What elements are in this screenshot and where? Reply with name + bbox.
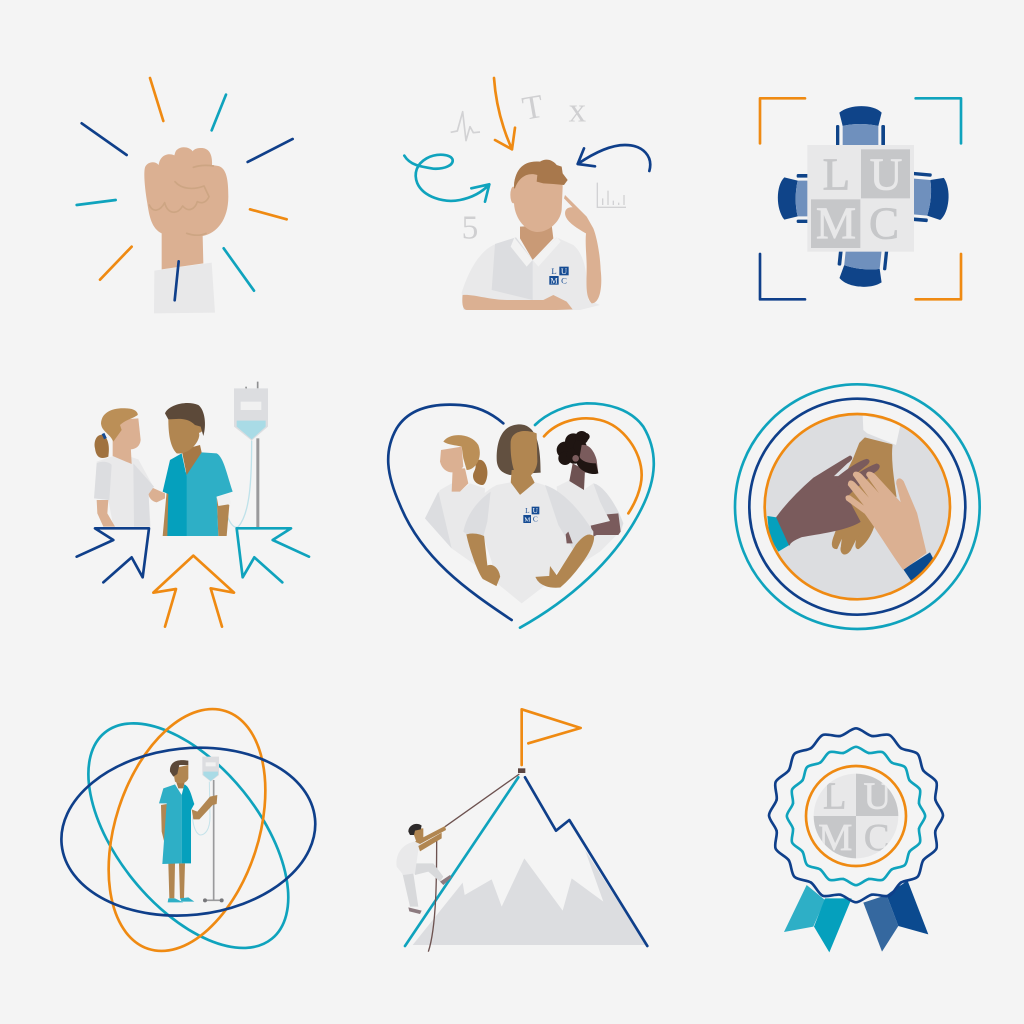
flag <box>522 709 581 765</box>
LUMC seal <box>813 773 899 859</box>
chairs <box>778 106 951 289</box>
medium-tone hand <box>833 438 896 554</box>
table with LUMC logo <box>807 145 914 252</box>
person left <box>425 435 487 568</box>
IV bag <box>234 382 268 441</box>
shirt <box>462 237 600 310</box>
nurse <box>94 408 165 527</box>
orbit rings <box>50 688 327 983</box>
heart orange stroke <box>544 418 642 513</box>
logo on shirt: M <box>550 276 558 285</box>
teal cuff <box>767 516 789 552</box>
table with LUMC logo: C <box>869 198 899 248</box>
ribbon right <box>863 880 928 952</box>
heart teal stroke <box>520 403 654 628</box>
LUMC seal: U <box>863 775 891 817</box>
teal looping arrow <box>404 155 489 202</box>
neck <box>520 225 553 260</box>
illustration grid <box>60 76 981 952</box>
logo on shirt: M <box>524 517 530 524</box>
rope <box>428 774 519 952</box>
logo on shirt <box>549 266 569 285</box>
hair <box>514 160 568 188</box>
IV pole <box>256 438 259 528</box>
raised arm <box>564 195 601 303</box>
orange arrow <box>153 556 234 627</box>
LUMC seal: L <box>823 775 846 817</box>
person centre <box>463 424 593 603</box>
head <box>514 167 563 232</box>
navy ring <box>749 399 965 615</box>
panel: meeting table <box>760 98 961 299</box>
mountain teal slope <box>405 777 518 946</box>
IV pole and bag <box>193 757 224 902</box>
panel: climber and mountain <box>396 709 647 952</box>
collar <box>511 237 561 267</box>
logo on shirt: C <box>533 515 538 524</box>
mountain <box>413 850 646 945</box>
orange ring <box>806 766 906 866</box>
panel: joined hands in circles <box>735 384 980 629</box>
corner brackets <box>760 98 961 299</box>
rosette navy scalloped edge <box>769 728 943 902</box>
radiating lines <box>77 78 293 300</box>
climber <box>396 824 452 914</box>
panel: nurse and patient with arrows <box>77 382 309 627</box>
logo on shirt: U <box>533 506 539 515</box>
logo on shirt <box>523 506 539 524</box>
navy cuff <box>903 552 934 582</box>
logo on shirt: U <box>561 266 568 276</box>
navy arrow <box>77 528 149 582</box>
logo on shirt: L <box>525 506 530 515</box>
upper sleeve <box>863 415 901 445</box>
panel: thinking nurse <box>404 78 650 310</box>
gray disc <box>765 414 950 599</box>
IV tube <box>223 441 252 527</box>
dark hand <box>777 456 879 545</box>
navy arrow <box>578 145 650 171</box>
panel: heart with care team <box>388 403 654 628</box>
person right <box>557 431 623 575</box>
pulse symbol <box>451 112 480 141</box>
rosette backing <box>773 732 939 898</box>
orange arrow <box>494 78 515 149</box>
shirt shading <box>492 237 533 300</box>
table with LUMC logo: M <box>816 198 856 248</box>
table with LUMC logo: L <box>823 149 850 199</box>
patient <box>163 403 233 536</box>
panel: patient in orbits <box>50 688 327 983</box>
letter x: x <box>569 91 587 130</box>
teal arrow <box>237 528 309 582</box>
rope anchor <box>518 768 525 773</box>
rosette teal scalloped edge <box>787 747 925 885</box>
ribbon left <box>784 885 852 952</box>
LUMC seal: M <box>818 817 852 859</box>
logo on shirt: C <box>561 275 567 285</box>
heart navy stroke <box>388 405 512 620</box>
ear <box>510 187 516 203</box>
resting arm <box>462 295 573 310</box>
mini bar chart <box>597 183 626 207</box>
mountain navy slope <box>525 777 647 946</box>
letter T: T <box>520 88 546 128</box>
panel: raised fist <box>77 78 293 313</box>
number 5: 5 <box>462 209 478 246</box>
panel: rosette award <box>769 728 943 952</box>
light hand <box>846 472 926 569</box>
patient figure <box>159 760 217 902</box>
icon: fist <box>144 147 228 269</box>
orange ring <box>765 414 950 599</box>
logo on shirt: L <box>551 266 557 276</box>
table with LUMC logo: U <box>870 149 902 199</box>
fist finger creases <box>149 165 213 235</box>
LUMC seal: C <box>864 817 889 859</box>
shirt sleeve <box>154 263 215 313</box>
teal ring <box>735 384 980 629</box>
